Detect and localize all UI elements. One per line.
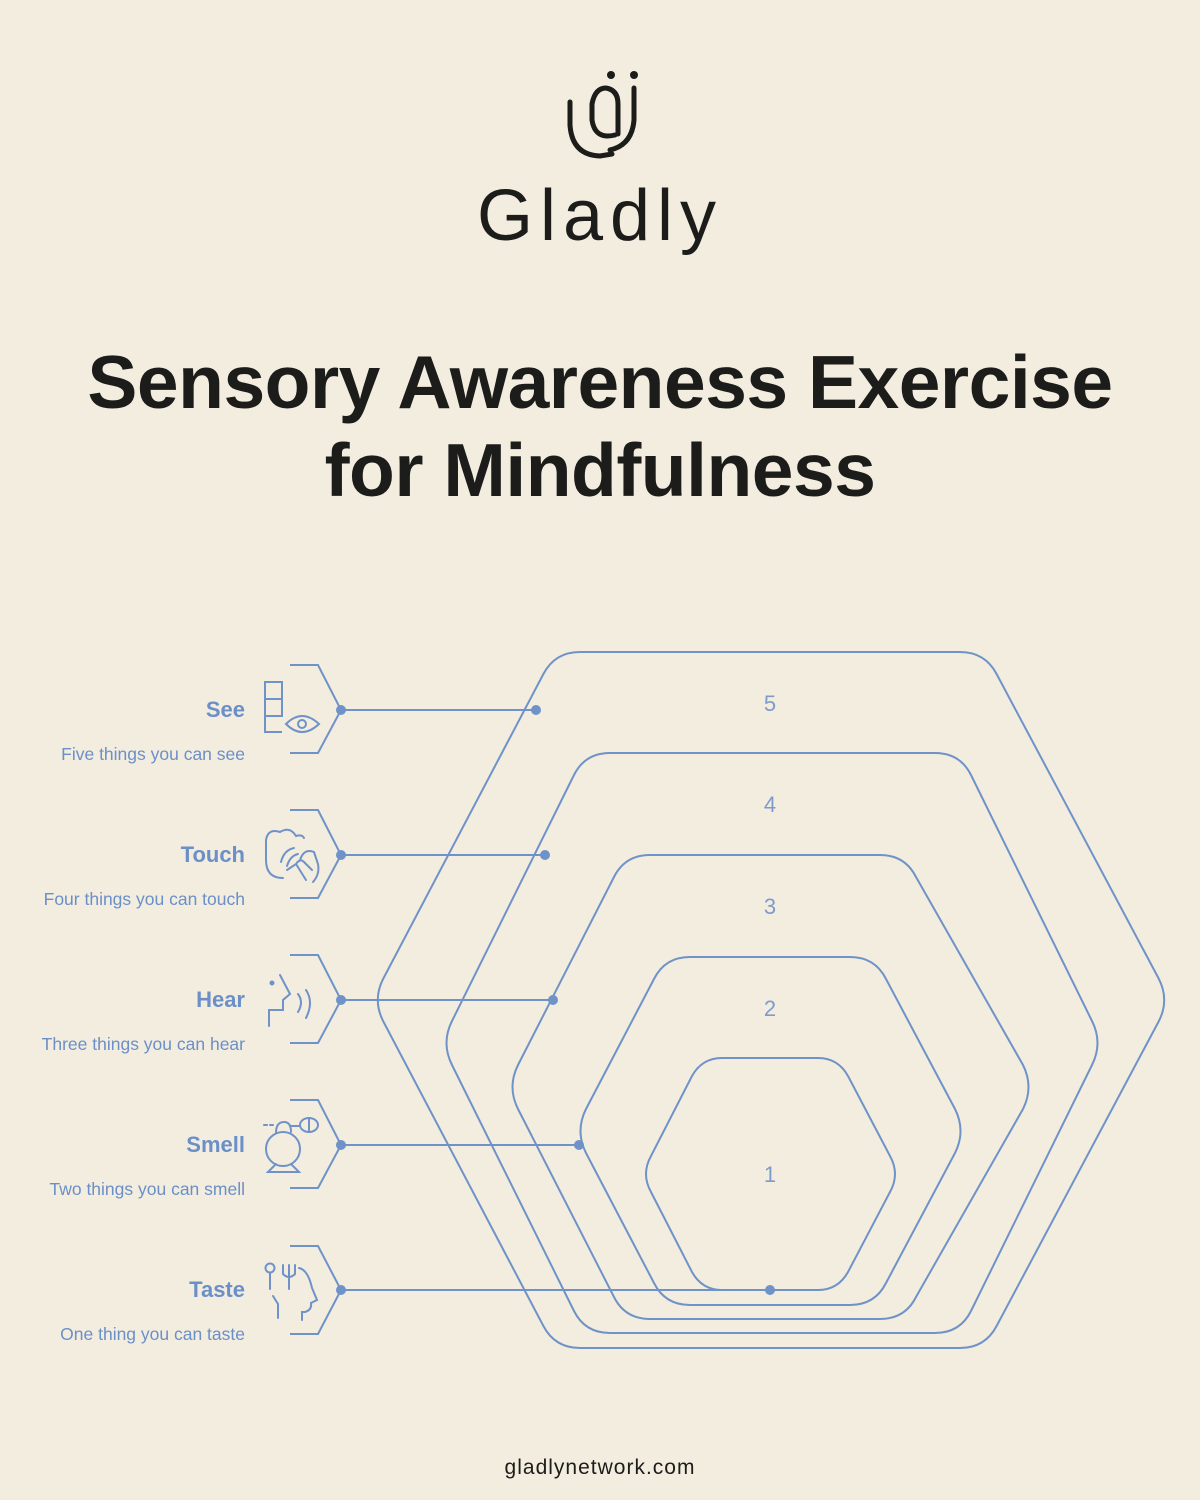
- label: see: Five things you can see: [61, 744, 245, 764]
- label: see: See: [206, 697, 245, 722]
- hexagon 1: [646, 1058, 895, 1290]
- connector: taste: [290, 1246, 774, 1334]
- icon: eye: [265, 682, 319, 732]
- label: taste: One thing you can taste: [60, 1324, 245, 1344]
- label: smell: [49, 1132, 245, 1199]
- label: hear: [42, 987, 245, 1054]
- hexagon 2: [580, 957, 960, 1305]
- hexagon numbers: 2: [764, 996, 776, 1021]
- hexagon numbers: [764, 691, 776, 1187]
- connector: touch: [290, 810, 549, 898]
- connector: hear: [290, 955, 557, 1043]
- label: taste: Taste: [189, 1277, 245, 1302]
- label: hear: Three things you can hear: [42, 1034, 245, 1054]
- logo icon: [568, 71, 638, 158]
- icon: touch: [266, 830, 318, 882]
- label: touch: [44, 842, 245, 909]
- label: see: [61, 697, 245, 764]
- label: touch: Touch: [181, 842, 245, 867]
- brand wordmark: Gladly: [477, 176, 723, 256]
- label: taste: [60, 1277, 245, 1344]
- hexagon numbers: 5: [764, 691, 776, 716]
- icon: smell: [264, 1118, 318, 1172]
- title: [87, 340, 1113, 512]
- hexagon numbers: 1: [764, 1162, 776, 1187]
- hexagon 5: [378, 652, 1164, 1348]
- hexagon numbers: 3: [764, 894, 776, 919]
- label: smell: Smell: [186, 1132, 245, 1157]
- icon: taste: [266, 1264, 317, 1320]
- title: Sensory Awareness Exercise: [87, 340, 1113, 424]
- hexagon 3: [512, 855, 1028, 1319]
- label: hear: Hear: [196, 987, 245, 1012]
- label: touch: Four things you can touch: [44, 889, 245, 909]
- connector: see: [290, 665, 540, 753]
- icon: hear: [269, 975, 310, 1026]
- title: for Mindfulness: [325, 428, 875, 512]
- footer url: gladlynetwork.com: [505, 1456, 695, 1479]
- label: smell: Two things you can smell: [49, 1179, 245, 1199]
- hexagon 4: [446, 753, 1098, 1333]
- connector: smell: [290, 1100, 583, 1188]
- hexagon numbers: 4: [764, 792, 776, 817]
